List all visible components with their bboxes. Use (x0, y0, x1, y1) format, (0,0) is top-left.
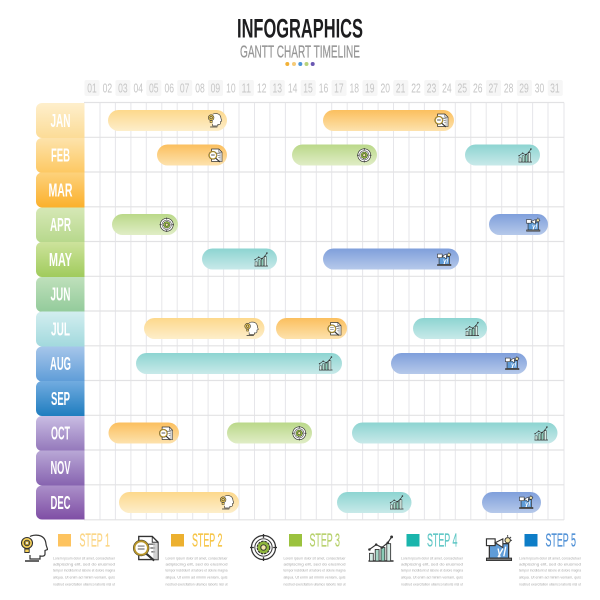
DEC bar step 1 (119, 492, 239, 513)
date header 01 to 31: 19 (365, 82, 374, 96)
JUL bar step 2 (276, 318, 347, 339)
date header 01 to 31: 23 (427, 82, 436, 96)
date header 01 to 31: 02 (103, 82, 112, 96)
step 3 swatch (289, 534, 302, 546)
date header 01 to 31: 31 (550, 82, 560, 96)
step 4 text (401, 556, 464, 586)
date header 01 to 31: 24 (442, 82, 452, 96)
date header 01 to 31: 09 (211, 82, 220, 96)
step 5 text: Lorem ipsum dolor sit amet, consectetuer (519, 556, 582, 560)
FEB bar step 4 (465, 144, 540, 166)
date header 01 to 31 (84, 80, 563, 96)
step 4 text: nostrud exercitation ullamco laboris nisi ut (401, 582, 464, 586)
step 2 text: aliqua. Ut enim ad minim veniam, quis (166, 574, 228, 580)
month: JAN (36, 103, 84, 138)
month: OCT: OCT (51, 424, 70, 444)
date header 01 to 31: 12 (257, 82, 266, 96)
date header 01 to 31: 27 (488, 82, 498, 96)
date header 01 to 31: 26 (473, 82, 482, 96)
month: MAY: MAY (49, 250, 72, 270)
month: JAN: JAN (50, 111, 70, 131)
AUG bar step 4 (136, 353, 342, 374)
step 3 text: tempor incididunt ut labore et dolore magna (284, 568, 346, 572)
month: SEP (36, 381, 84, 416)
JUL bar step 1 (144, 318, 264, 339)
subtitle: GANTT CHART TIMELINE (240, 42, 360, 62)
month: NOV: NOV (50, 458, 70, 478)
step 2 text: tempor incididunt ut labore et dolore magna (166, 568, 228, 572)
month: MAR: MAR (48, 180, 72, 200)
step 2 text (166, 556, 228, 586)
date header 01 to 31: 13 (272, 82, 282, 96)
step 3 text (284, 556, 346, 586)
date header 01 to 31: 01 (87, 82, 97, 96)
date header 01 to 31: 04 (134, 82, 143, 96)
month: DEC (36, 486, 84, 520)
date header 01 to 31: 16 (319, 82, 328, 96)
legend step 3: STEP 3 (310, 530, 340, 550)
APR bar step 5 (489, 214, 548, 235)
date header 01 to 31: 22 (411, 82, 421, 96)
title: INFOGRAPHICS (237, 14, 363, 44)
step 5 text: aliqua. Ut enim ad minim veniam, quis (519, 574, 581, 580)
DEC bar step 4 (337, 492, 412, 513)
month: FEB: FEB (51, 146, 70, 166)
date header 01 to 31: 20 (380, 82, 390, 96)
step 1 text: aliqua. Ut enim ad minim veniam, quis (53, 574, 115, 580)
date header 01 to 31: 21 (396, 82, 405, 96)
month: APR (36, 208, 84, 242)
icon: growth chart (368, 535, 394, 561)
icon: laptop marketing (486, 535, 512, 561)
month: SEP: SEP (51, 389, 70, 409)
MAY bar step 4 (202, 248, 277, 270)
step 3 text: aliqua. Ut enim ad minim veniam, quis (284, 574, 346, 580)
step 4 text: adipiscing elit, sed do eiusmod (401, 562, 463, 566)
step 1 text (53, 556, 116, 586)
date header 01 to 31: 11 (242, 82, 251, 96)
step 5 text: adipiscing elit, sed do eiusmod (519, 562, 581, 566)
step 4 swatch (406, 534, 420, 546)
JAN bar step 1 (108, 110, 227, 131)
FEB bar step 2 (157, 144, 227, 166)
step 1 text: adipiscing elit, sed do eiusmod (53, 562, 115, 566)
month: OCT (36, 416, 84, 451)
step 2 text: adipiscing elit, sed do eiusmod (166, 562, 228, 566)
legend step 3 (250, 530, 346, 586)
date header 01 to 31: 29 (519, 82, 529, 96)
month: AUG: AUG (50, 354, 71, 374)
month: APR: APR (50, 215, 71, 235)
gantt grid (84, 102, 564, 520)
date header 01 to 31: 15 (303, 82, 313, 96)
date header 01 to 31: 30 (535, 82, 544, 96)
date header 01 to 31: 08 (195, 82, 205, 96)
month: JUN (36, 277, 84, 312)
step 4 text: tempor incididunt ut labore et dolore magna (401, 568, 464, 572)
OCT bar step 3 (227, 422, 312, 444)
step 2 text: nostrud exercitation ullamco laboris nisi ut (166, 582, 228, 586)
title dots (285, 62, 315, 66)
legend step 4: STEP 4 (427, 530, 458, 550)
month: DEC: DEC (50, 493, 70, 513)
legend step 4 (368, 530, 464, 586)
date header 01 to 31: 10 (226, 82, 236, 96)
month: NOV (36, 450, 84, 486)
month: JUL: JUL (51, 320, 70, 340)
step 3 text: Lorem ipsum dolor sit amet, consectetuer (284, 556, 346, 560)
date header 01 to 31: 07 (180, 82, 189, 96)
step 1 swatch (58, 534, 71, 546)
APR bar step 3 (112, 214, 178, 235)
OCT bar step 2 (108, 422, 179, 444)
icon: target gear (250, 534, 277, 561)
date header 01 to 31: 05 (149, 82, 158, 96)
JUL bar step 4 (413, 318, 487, 339)
step 1 text: tempor incididunt ut labore et dolore magna (53, 568, 116, 572)
date header 01 to 31: 17 (334, 82, 344, 96)
legend step 1: STEP 1 (80, 530, 110, 550)
month: JUL (36, 312, 84, 346)
step 1 text: Lorem ipsum dolor sit amet, consectetuer (53, 556, 116, 560)
FEB bar step 3 (292, 144, 377, 166)
date header 01 to 31: 18 (350, 82, 359, 96)
DEC bar step 5 (482, 492, 541, 513)
month: MAY (36, 242, 84, 277)
step 5 swatch (524, 534, 538, 546)
legend step 2 (133, 530, 228, 586)
legend step 5 (486, 530, 582, 586)
JAN bar step 2 (323, 110, 454, 131)
icon: head with light bulb (22, 535, 48, 561)
AUG bar step 5 (391, 353, 527, 374)
icon: document with magnifier (133, 536, 158, 561)
month: JUN: JUN (50, 284, 70, 304)
step 1 text: nostrud exercitation ullamco laboris nisi ut (53, 582, 116, 586)
month column (36, 103, 84, 520)
date header 01 to 31: 28 (504, 82, 513, 96)
legend step 2: STEP 2 (192, 530, 222, 550)
month: FEB (36, 138, 84, 173)
MAY bar step 5 (323, 248, 459, 270)
date header 01 to 31: 14 (288, 82, 297, 96)
step 2 text: Lorem ipsum dolor sit amet, consectetuer (166, 556, 228, 560)
date header 01 to 31: 03 (118, 82, 128, 96)
step 3 text: adipiscing elit, sed do eiusmod (284, 562, 346, 566)
month: AUG (36, 346, 84, 382)
step 4 text: aliqua. Ut enim ad minim veniam, quis (401, 574, 463, 580)
legend step 1 (22, 530, 116, 586)
step 5 text (519, 556, 582, 586)
step 2 swatch (171, 534, 184, 546)
step 5 text: tempor incididunt ut labore et dolore magna (519, 568, 582, 572)
date header 01 to 31: 06 (164, 82, 174, 96)
date header 01 to 31: 25 (458, 82, 467, 96)
month: MAR (36, 172, 84, 208)
gantt bars (108, 110, 558, 513)
OCT bar step 4 (352, 422, 558, 444)
step 3 text: nostrud exercitation ullamco laboris nisi ut (284, 582, 346, 586)
step 5 text: nostrud exercitation ullamco laboris nisi ut (519, 582, 582, 586)
step 4 text: Lorem ipsum dolor sit amet, consectetuer (401, 556, 464, 560)
